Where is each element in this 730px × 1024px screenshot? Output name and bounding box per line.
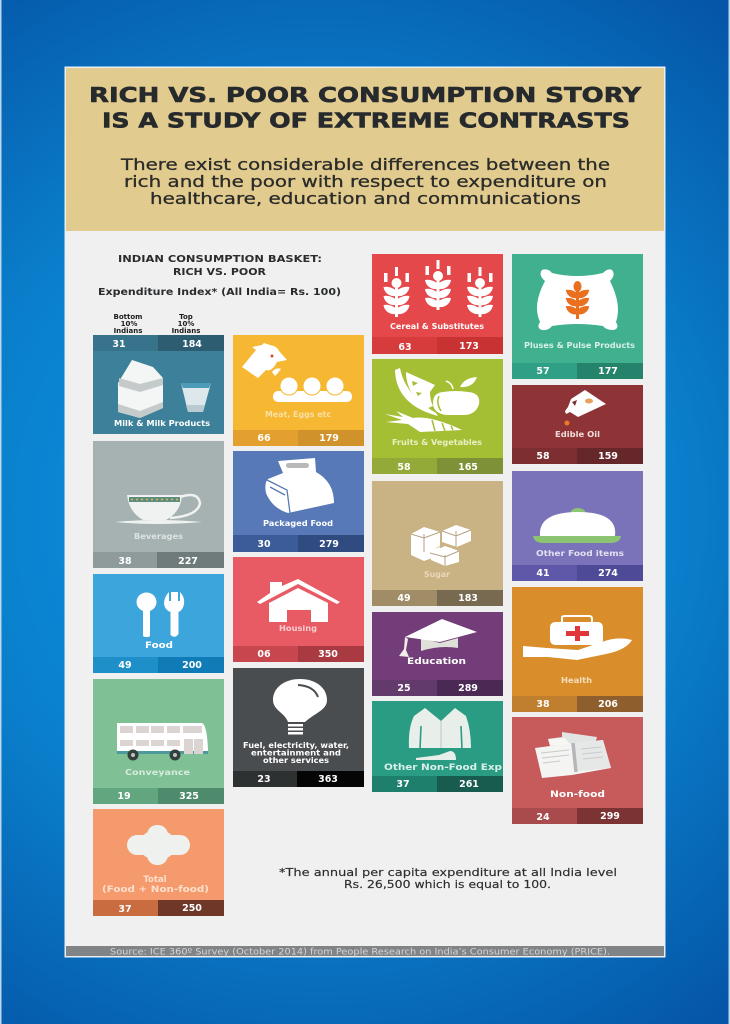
card: meat [233,335,364,446]
card: edible oil: 58 [536,451,550,462]
card: cereal: 63 [398,342,412,353]
basket heading: Expenditure Index* (All India= Rs. 100) [98,287,341,298]
icon: plus [127,825,190,865]
card: education: 25 [397,683,411,694]
column legend: Top [179,313,193,321]
card: health: 206 [598,699,618,710]
card: edible oil [512,385,643,464]
icon: double-decker bus [117,723,208,760]
card: housing: Housing [279,624,317,633]
icon: milk carton and glass [118,360,211,418]
card: housing [233,557,364,662]
basket heading: INDIAN CONSUMPTION BASKET: [118,254,322,265]
card: fruits: Fruits & Vegetables [392,438,482,447]
card: edible oil: Edible Oil [555,430,600,439]
card: meat: 179 [319,433,339,444]
icon: medical case on hand [523,616,632,660]
card: other food items: 274 [598,568,618,579]
card: conveyance: 325 [179,791,199,802]
title: RICH VS. POOR CONSUMPTION STORY [89,83,642,107]
subtitle: There exist considerable differences between the [120,155,610,174]
card: pulses: 57 [536,366,550,377]
card: food [93,574,224,673]
title [89,83,642,132]
column legend: 10% [121,320,137,328]
card: fuel: Fuel, electricity, water, [243,741,349,750]
card: packaged food: Packaged Food [263,519,333,528]
card: other non-food: Other Non-Food Exp [384,763,503,773]
footnote [279,866,617,891]
card: packaged food: 30 [257,539,271,550]
card: beverages [93,441,224,568]
icon: open book [535,732,611,778]
card: fruits: 165 [458,462,478,473]
card: other food items: Other Food items [536,549,624,558]
card: meat: Meat, Eggs etc [265,410,331,419]
card: meat: 66 [257,433,271,444]
card: total: (Food + Non-food) [102,885,209,895]
card: housing: 06 [257,649,271,660]
card: packaged food [233,451,364,552]
card: education: Education [407,657,466,667]
column legend [114,313,200,335]
card: fuel: 23 [257,774,271,785]
icon: house [257,579,340,622]
icon: hen and eggs [242,343,352,402]
card: pulses: 177 [598,366,618,377]
source bar: Source: ICE 360º Survey (October 2014) from People Research on India’s Consumer Economy (PRICE). [110,948,610,958]
column legend: Bottom [114,313,142,321]
icon: graduation cap [399,619,477,657]
card: health: Health [561,676,592,685]
card: fruits [372,359,503,474]
card: beverages: 227 [178,556,198,567]
card: total: Total [143,875,167,885]
card: sugar [372,481,503,606]
card: cereal: Cereal & Substitutes [390,322,484,331]
card: cereal: 173 [459,341,479,352]
footnote: *The annual per capita expenditure at all India level [279,866,617,879]
footnote: Rs. 26,500 which is equal to 100. [344,878,551,891]
subtitle: healthcare, education and communications [150,189,581,208]
card: pulses: Pluses & Pulse Products [524,341,635,350]
card: non-food: 299 [600,811,620,822]
card: education: 289 [458,683,478,694]
card: non-food [512,717,643,824]
subtitle [120,155,610,208]
icon: package bag [265,458,334,513]
icon: grain sack [537,269,618,330]
card: food: 49 [118,660,132,671]
card: edible oil: 159 [598,451,618,462]
header band [66,68,664,231]
card: other non-food: 37 [396,779,410,790]
title: IS A STUDY OF EXTREME CONTRASTS [102,108,630,132]
basket heading [98,254,341,298]
card: food: 200 [182,660,202,671]
card: conveyance: 19 [117,791,131,802]
source bar [66,946,664,958]
card: conveyance: Conveyance [125,768,191,777]
card: health [512,587,643,712]
card: milk: 184 [182,339,202,350]
card: non-food: Non-food [550,790,605,800]
card: beverages: Beverages [134,532,183,541]
icon: covered dish [533,508,621,543]
card: beverages: 38 [118,556,132,567]
card: pulses [512,254,643,379]
card: fuel: other services [263,756,329,765]
card: food: Food [145,641,173,651]
card: fuel: 363 [318,774,338,785]
card: health: 38 [536,699,550,710]
card: total: 250 [182,903,202,914]
card: fuel: entertainment and [251,748,341,758]
column legend: Indians [114,327,142,335]
main panel [65,67,665,957]
icon: sugar cubes [411,525,471,566]
card: other non-food [372,701,503,792]
icon: oil bottle [564,390,606,426]
icon: fruit and vegetables [385,368,479,432]
card: fuel [233,668,364,787]
card: conveyance [93,679,224,804]
card: packaged food: 279 [319,539,339,550]
card: housing: 350 [318,649,338,660]
card: sugar: 49 [397,593,411,604]
icon: tea cup [115,495,202,524]
card: cereal [372,254,503,354]
card: total: 37 [118,904,132,915]
icon: cardigan and shoe [409,708,471,760]
card: total [93,809,224,916]
subtitle: rich and the poor with respect to expenditure on [124,172,607,191]
icon: light bulb [273,679,327,734]
card: education [372,612,503,696]
card: milk: Milk & Milk Products [114,419,210,428]
icon: spoon and fork [136,592,184,637]
card: sugar: Sugar [424,570,450,579]
column legend: 10% [178,320,194,328]
card: other food items [512,471,643,581]
card: other non-food: 261 [459,779,479,790]
card: sugar: 183 [458,593,478,604]
card: non-food: 24 [536,812,550,823]
column legend: Indians [172,327,200,335]
card: milk: 31 [112,339,126,350]
icon: three wheat ears [384,260,493,317]
card: fruits: 58 [397,462,411,473]
basket heading: RICH VS. POOR [173,267,266,278]
card: milk [93,335,224,434]
card: other food items: 41 [536,568,550,579]
